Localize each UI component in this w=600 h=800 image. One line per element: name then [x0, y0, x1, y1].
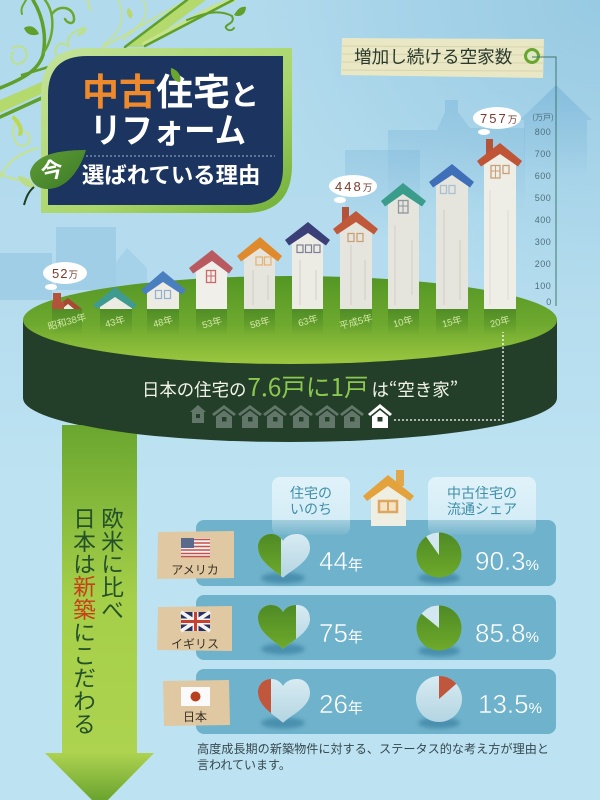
house 20年: [477, 139, 522, 309]
bubble 52万: 52万: [52, 266, 79, 281]
axis: 800: [535, 127, 551, 137]
flag: Japan: [181, 687, 210, 706]
icon row: houses: [190, 404, 392, 428]
footnote: 言われています。: [197, 758, 291, 772]
year labels: 48年: [152, 313, 175, 330]
bubble 757万: [473, 107, 521, 135]
house 10年: [381, 183, 426, 309]
value: 85.8%: 85.8%: [475, 618, 539, 648]
header: 中古住宅の流通シェア: 中古住宅の: [447, 483, 517, 503]
leaf on title: [171, 68, 181, 82]
value: 26年: 26年: [319, 689, 363, 719]
leaf badge: 今: [38, 151, 66, 187]
flag: USA: [181, 538, 210, 557]
heart: UK 75年: [258, 605, 310, 654]
panel: UK row: [196, 595, 556, 660]
background house silhouettes: [0, 85, 592, 300]
title line 3: 選ばれている理由: [82, 158, 260, 190]
title line 1: 中古住宅と: [82, 62, 259, 116]
arrow text: [70, 507, 124, 735]
panel navy background: [48, 56, 283, 205]
bubble 757万: 757万: [480, 111, 517, 126]
header: 住宅のいのち: いのち: [290, 499, 332, 519]
axis: (万戸): [532, 112, 554, 123]
axis: 100: [535, 281, 551, 291]
axis: 0: [546, 297, 552, 307]
value: 75年: 75年: [319, 618, 363, 648]
axis: 700: [535, 149, 551, 159]
tag: UK: [157, 606, 232, 652]
axis: [532, 57, 556, 307]
tag: Japan: [163, 680, 230, 726]
value: 13.5%: 13.5%: [478, 689, 542, 719]
heart: America 44年: [258, 534, 310, 584]
year labels: 53年: [201, 314, 224, 331]
year labels: 10年: [392, 313, 415, 330]
axis: 300: [535, 237, 551, 247]
axis: 500: [535, 193, 551, 203]
leaf badge: [24, 150, 86, 205]
axis: 400: [535, 215, 551, 225]
pie: America 90.3%: [416, 532, 462, 584]
header: 住宅のいのち: 住宅の: [290, 483, 332, 503]
arrow: [45, 420, 154, 800]
year labels: 昭和38年: [47, 311, 88, 333]
pie: Japan 13.5%: [416, 676, 462, 728]
house 昭和38年: [52, 293, 82, 309]
heart: Japan 26年: [258, 679, 310, 728]
vine decoration: [0, 0, 246, 188]
bubble 448万: 448万: [335, 179, 372, 194]
year labels: 43年: [104, 313, 127, 330]
bubble 448万: [329, 175, 377, 203]
pie: UK 85.8%: [416, 605, 462, 656]
house 58年: [237, 237, 282, 309]
header: 住宅のいのち: [272, 477, 350, 535]
house columns shadows: [52, 309, 516, 335]
title panel: [24, 48, 292, 213]
bubble 52万: [43, 262, 87, 290]
panel frame: [41, 48, 292, 213]
footnote: 高度成長期の新築物件に対する、ステータス的な考え方が理由と: [197, 741, 549, 756]
arrow text: 日本は 新築 にこだわる: [70, 507, 96, 735]
arrow text: 欧米に比べ: [98, 507, 124, 621]
year labels: 58年: [249, 314, 272, 331]
footnote: [197, 741, 549, 772]
statistic: 7.6戸に1戸: 日本の住宅の7.6戸に1戸は“空き家”: [142, 369, 458, 404]
house 平成5年: [333, 207, 378, 309]
value: 90.3%: 90.3%: [475, 546, 539, 576]
dotted leader line: [394, 332, 503, 420]
icon: header house: [363, 470, 414, 526]
tag: vacant home count: 増加し続ける空家数: [354, 44, 513, 69]
tag: vacant home count: [341, 38, 544, 78]
header: 中古住宅の流通シェア: 流通シェア: [447, 499, 517, 519]
year labels: [47, 311, 512, 333]
tag: UK: イギリス: [171, 635, 219, 652]
house 63年: [285, 222, 330, 309]
panel: America row: [196, 520, 556, 586]
platform top: [23, 276, 557, 364]
year labels: 15年: [441, 313, 464, 330]
house 53年: [189, 250, 233, 309]
tag: America: [157, 531, 234, 579]
tag: America: アメリカ: [171, 561, 219, 578]
year labels: 平成5年: [338, 312, 374, 332]
axis: 600: [535, 171, 551, 181]
panel: Japan row: [196, 669, 556, 734]
platform: [23, 276, 557, 442]
tag: Japan: 日本: [183, 708, 207, 725]
flag: UK: [181, 612, 210, 631]
house 43年: [93, 287, 137, 309]
header: 中古住宅の流通シェア: [428, 477, 536, 535]
house 48年: [141, 271, 186, 309]
year labels: 63年: [297, 312, 320, 329]
dotted divider: [82, 155, 275, 157]
house 15年: [429, 164, 474, 309]
title line 2: リフォーム: [90, 103, 246, 154]
value: 44年: 44年: [319, 546, 363, 576]
year labels: 20年: [489, 313, 512, 330]
axis: 200: [535, 259, 551, 269]
platform side: [23, 320, 557, 442]
